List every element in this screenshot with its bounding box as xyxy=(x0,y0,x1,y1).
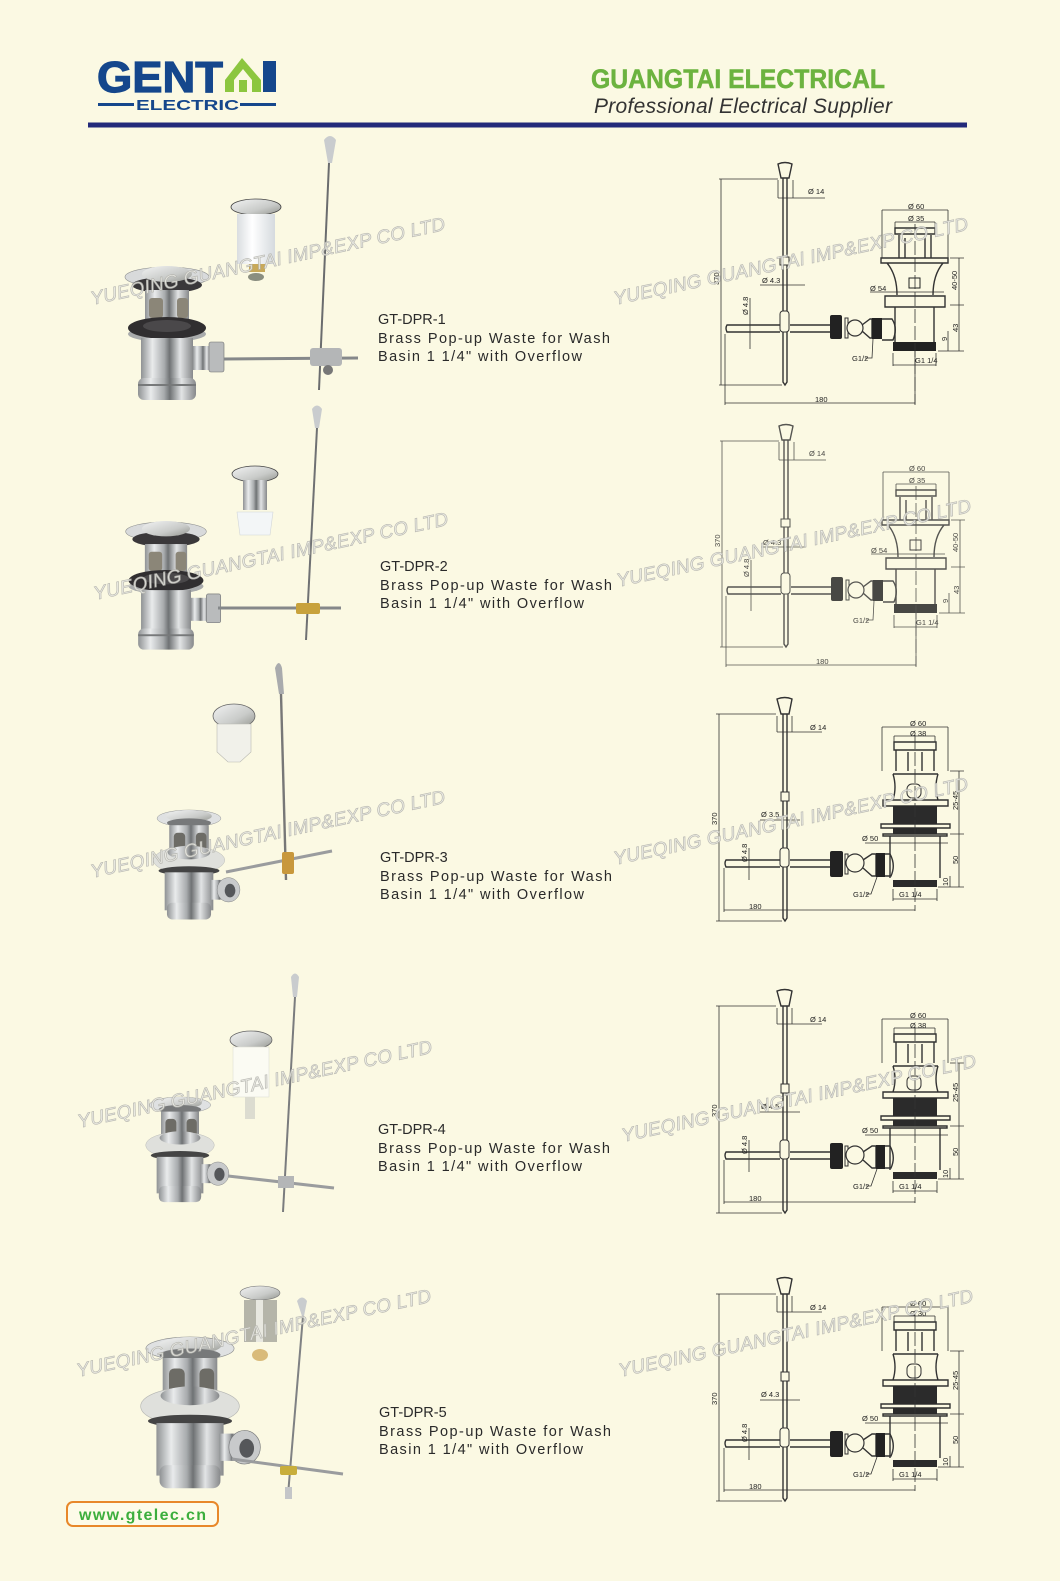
technical drawing 1: G1/2 xyxy=(852,354,868,363)
technical drawing 4: 10 xyxy=(941,1170,950,1178)
watermarks: YUEQING GUANGTAI IMP&EXP CO LTD xyxy=(92,509,450,605)
technical drawing 3: 10 xyxy=(941,878,950,886)
header rule xyxy=(88,122,967,128)
technical drawing 1: 370 xyxy=(712,272,721,285)
product photo 1 xyxy=(125,136,358,400)
watermarks xyxy=(75,214,978,1382)
product label 1: Brass Pop-up Waste for Wash xyxy=(378,331,610,347)
technical drawing 2 xyxy=(713,424,965,667)
technical drawing 2: 370 xyxy=(713,534,722,547)
product photo 4 xyxy=(146,974,334,1212)
technical drawing 5: Ø 30 xyxy=(910,1309,926,1318)
technical drawing 4: Ø 4.8 xyxy=(740,1136,749,1154)
technical drawing 1: Ø 4.3 xyxy=(762,276,780,285)
product label 2: Basin 1 1/4" with Overflow xyxy=(380,596,585,612)
technical drawing 4: 370 xyxy=(710,1104,719,1117)
logo: Gentai Electric: ELECTRIC xyxy=(136,97,239,114)
technical drawing 1: G1 1/4 xyxy=(915,356,938,365)
watermarks: YUEQING GUANGTAI IMP&EXP CO LTD xyxy=(612,774,970,870)
product label 3: Basin 1 1/4" with Overflow xyxy=(380,887,585,903)
technical drawing 2: 9 xyxy=(941,599,950,603)
product label 2: Brass Pop-up Waste for Wash xyxy=(380,578,612,594)
logo: Gentai Electric xyxy=(97,53,276,114)
watermarks: YUEQING GUANGTAI IMP&EXP CO LTD xyxy=(620,1051,978,1147)
technical drawing 4: 50 xyxy=(951,1148,960,1156)
product label 5: Basin 1 1/4" with Overflow xyxy=(379,1442,584,1458)
technical drawing 2: 43 xyxy=(952,586,961,594)
watermarks: YUEQING GUANGTAI IMP&EXP CO LTD xyxy=(612,214,970,310)
product label 4: GT-DPR-4 xyxy=(378,1122,446,1138)
technical drawing 2: G1/2 xyxy=(853,616,869,625)
technical drawing 1: Ø 60 xyxy=(908,202,924,211)
technical drawing 4: 25-45 xyxy=(951,1083,960,1102)
technical drawing 4: Ø 14 xyxy=(810,1015,826,1024)
website badge xyxy=(67,1502,218,1526)
technical drawing 4 xyxy=(710,990,964,1213)
product label 1: GT-DPR-1 xyxy=(378,312,446,328)
technical drawing 3: Ø 14 xyxy=(810,723,826,732)
technical drawing 4: 180 xyxy=(749,1194,762,1203)
technical drawing 5: 10 xyxy=(941,1458,950,1466)
technical drawing 1: Ø 35 xyxy=(908,214,924,223)
technical drawing 2: Ø 54 xyxy=(871,546,887,555)
product label 3: GT-DPR-3 xyxy=(380,850,448,866)
technical drawing 1: Ø 54 xyxy=(870,284,886,293)
technical drawing 5: 25-45 xyxy=(951,1371,960,1390)
technical drawing 2: Ø 4.8 xyxy=(742,559,751,577)
watermarks: YUEQING GUANGTAI IMP&EXP CO LTD xyxy=(89,787,447,883)
technical drawing 4: G1/2 xyxy=(853,1182,869,1191)
technical drawing 4: Ø 38 xyxy=(910,1021,926,1030)
technical drawing 4: G1 1/4 xyxy=(899,1182,922,1191)
technical drawing 3: 180 xyxy=(749,902,762,911)
website badge: www.gtelec.cn xyxy=(78,1507,206,1524)
technical drawing 4: Ø 50 xyxy=(862,1126,878,1135)
product label 3: Brass Pop-up Waste for Wash xyxy=(380,869,612,885)
watermarks: YUEQING GUANGTAI IMP&EXP CO LTD xyxy=(615,496,973,592)
product label 2 xyxy=(380,559,612,612)
technical drawing 5: Ø 50 xyxy=(862,1414,878,1423)
product label 5: GT-DPR-5 xyxy=(379,1405,447,1421)
product label 4: Basin 1 1/4" with Overflow xyxy=(378,1159,583,1175)
technical drawing 4: Ø 4.5 xyxy=(761,1102,779,1111)
product photo 3 xyxy=(153,663,332,919)
watermarks: YUEQING GUANGTAI IMP&EXP CO LTD xyxy=(89,214,447,310)
tagline: Professional Electrical Supplier xyxy=(594,95,893,118)
technical drawing 2: G1 1/4 xyxy=(916,618,939,627)
technical drawing 5: 370 xyxy=(710,1392,719,1405)
product label 2: GT-DPR-2 xyxy=(380,559,448,575)
logo: Gentai Electric: GENT xyxy=(97,53,223,102)
technical drawing 3: 50 xyxy=(951,856,960,864)
product label 5: Brass Pop-up Waste for Wash xyxy=(379,1424,611,1440)
technical drawing 2: Ø 60 xyxy=(909,464,925,473)
technical drawing 2: 180 xyxy=(816,657,829,666)
technical drawing 3: Ø 4.8 xyxy=(740,844,749,862)
technical drawing 3 xyxy=(710,698,964,921)
technical drawing 3: G1/2 xyxy=(853,890,869,899)
product label 5 xyxy=(379,1405,611,1458)
product photo 5 xyxy=(141,1286,343,1499)
technical drawing 5: Ø 4.3 xyxy=(761,1390,779,1399)
product label 1 xyxy=(378,312,610,365)
technical drawing 3: Ø 38 xyxy=(910,729,926,738)
technical drawing 5: Ø 14 xyxy=(810,1303,826,1312)
technical drawing 3: Ø 60 xyxy=(910,719,926,728)
technical drawing 1: 180 xyxy=(815,395,828,404)
product label 3 xyxy=(380,850,612,903)
technical drawing 1: 9 xyxy=(940,337,949,341)
product label 1: Basin 1 1/4" with Overflow xyxy=(378,349,583,365)
technical drawing 1 xyxy=(712,162,964,405)
product photo 2 xyxy=(126,406,341,650)
watermarks: YUEQING GUANGTAI IMP&EXP CO LTD xyxy=(75,1286,433,1382)
technical drawing 5: Ø 4.8 xyxy=(740,1424,749,1442)
technical drawing 2: 40-50 xyxy=(951,533,960,552)
technical drawing 2: Ø 35 xyxy=(909,476,925,485)
technical drawing 3: Ø 3.5 xyxy=(761,810,779,819)
watermarks: YUEQING GUANGTAI IMP&EXP CO LTD xyxy=(76,1037,434,1133)
technical drawing 2: Ø 14 xyxy=(809,449,825,458)
technical drawing 1: Ø 14 xyxy=(808,187,824,196)
technical drawing 5: G1/2 xyxy=(853,1470,869,1479)
watermarks: YUEQING GUANGTAI IMP&EXP CO LTD xyxy=(617,1286,975,1382)
technical drawing 5 xyxy=(710,1278,964,1501)
technical drawing 4: Ø 60 xyxy=(910,1011,926,1020)
technical drawing 1: 40-50 xyxy=(950,271,959,290)
technical drawing 2: Ø 4.3 xyxy=(763,538,781,547)
technical drawing 1: Ø 4.8 xyxy=(741,297,750,315)
product label 4: Brass Pop-up Waste for Wash xyxy=(378,1141,610,1157)
technical drawing 3: Ø 50 xyxy=(862,834,878,843)
technical drawing 5: 180 xyxy=(749,1482,762,1491)
technical drawing 3: 25-45 xyxy=(951,791,960,810)
technical drawing 5: Ø 60 xyxy=(910,1299,926,1308)
technical drawing 3: 370 xyxy=(710,812,719,825)
company title: GUANGTAI ELECTRICAL xyxy=(591,64,885,94)
technical drawing 5: 50 xyxy=(951,1436,960,1444)
product label 4 xyxy=(378,1122,610,1175)
technical drawing 3: G1 1/4 xyxy=(899,890,922,899)
technical drawing 5: G1 1/4 xyxy=(899,1470,922,1479)
technical drawing 1: 43 xyxy=(951,324,960,332)
